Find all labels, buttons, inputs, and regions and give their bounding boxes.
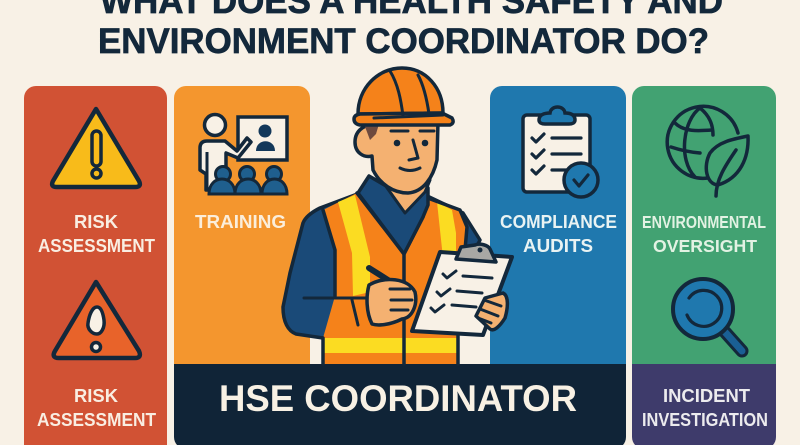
label: environmental oversight: ENVIRONMENTAL bbox=[642, 212, 766, 232]
panel: training bbox=[174, 86, 310, 364]
icon: checklist clipboard bbox=[523, 107, 598, 197]
label: risk assessment upper: RISK bbox=[74, 212, 118, 232]
icon: warning triangle orange bbox=[54, 282, 140, 358]
hard hat bbox=[354, 68, 453, 125]
clipboard with checklist bbox=[412, 244, 512, 335]
banner: HSE coordinator bbox=[174, 364, 626, 445]
icon: trainer with audience bbox=[200, 114, 287, 194]
title: ENVIRONMENT COORDINATOR DO? bbox=[98, 22, 709, 61]
title bbox=[98, 0, 723, 61]
hands and pen bbox=[367, 268, 507, 330]
label: environmental oversight: OVERSIGHT bbox=[653, 236, 757, 256]
body: shirt and arm bbox=[283, 193, 480, 338]
label: incident investigation: INCIDENT bbox=[663, 386, 750, 406]
panel: environmental oversight bbox=[632, 86, 776, 364]
label: risk assessment upper: ASSESSMENT bbox=[38, 236, 155, 256]
label: compliance audits: COMPLIANCE bbox=[500, 212, 617, 232]
panel: risk assessment bbox=[24, 86, 167, 445]
sleeve crease bbox=[304, 298, 368, 325]
icon: globe and leaf bbox=[667, 106, 748, 196]
label: compliance audits: AUDITS bbox=[523, 236, 593, 256]
label: risk assessment upper bbox=[38, 212, 155, 256]
illustration: HSE coordinator figure bbox=[283, 68, 512, 364]
hi-vis vest bbox=[323, 193, 467, 364]
panel: compliance audits bbox=[490, 86, 626, 364]
label: compliance audits bbox=[500, 212, 617, 256]
icon: warning triangle yellow bbox=[52, 109, 140, 187]
label: incident investigation: INVESTIGATION bbox=[642, 410, 768, 430]
label: risk assessment lower: RISK bbox=[74, 386, 118, 406]
label: environmental oversight bbox=[642, 212, 766, 256]
label: risk assessment lower: ASSESSMENT bbox=[37, 410, 156, 430]
label: risk assessment lower bbox=[37, 386, 156, 430]
label: training: TRAINING bbox=[195, 212, 286, 232]
banner: HSE coordinator: HSE COORDINATOR bbox=[219, 378, 577, 419]
panel: incident investigation bbox=[632, 364, 776, 445]
icon: magnifying glass bbox=[673, 279, 742, 351]
label: incident investigation bbox=[642, 386, 768, 430]
face bbox=[355, 122, 438, 213]
collar bbox=[358, 176, 428, 254]
